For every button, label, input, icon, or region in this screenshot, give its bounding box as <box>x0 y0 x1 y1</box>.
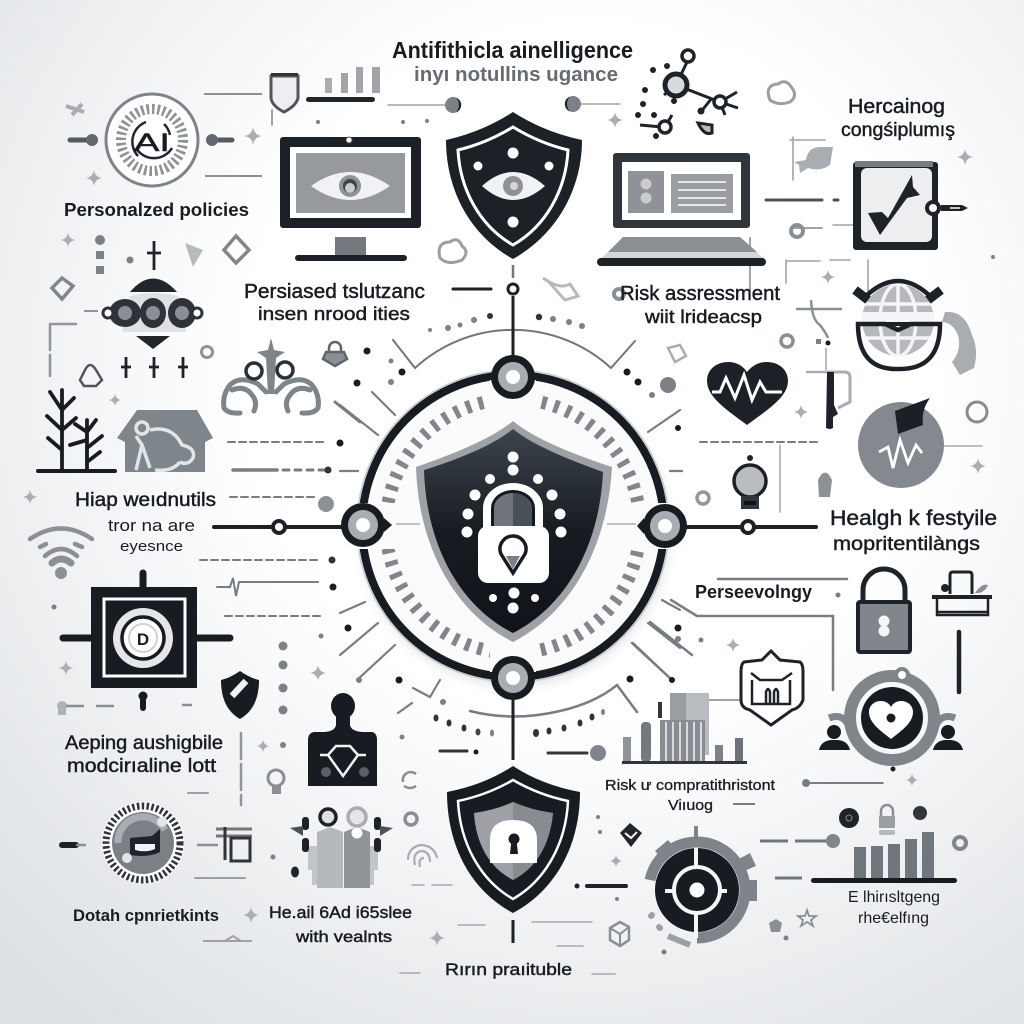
label: rırın: Rırın praıituble <box>445 960 572 979</box>
connector: shield dashes <box>440 745 606 943</box>
icon: gray alert circle <box>858 398 987 488</box>
icon: gray house <box>117 410 213 472</box>
label: elhirısltgeng: E lhirısltgeng <box>848 889 940 906</box>
label: hiap: eyesnce <box>120 538 183 555</box>
connectors: bottom right <box>733 780 883 804</box>
label: perseevolngy: Perseevolngy <box>695 582 812 602</box>
icon: cloud rings top <box>439 82 795 263</box>
icon: bar chart <box>760 805 966 883</box>
icon: globe <box>855 281 976 375</box>
icon: group of people <box>290 808 437 888</box>
label: persiased <box>244 281 425 324</box>
scattered dots <box>52 119 995 954</box>
sparkles <box>23 112 986 946</box>
icon: diamond badges <box>52 236 249 299</box>
icon: desk <box>932 572 992 692</box>
icon: house emblem <box>741 651 803 725</box>
connector dots under title <box>445 96 581 113</box>
label: hercainog: congśiplumış <box>841 120 955 141</box>
icon: eye shield <box>446 112 582 259</box>
label: health lifestyle: Healgh k festyile <box>830 507 997 530</box>
hub: right connector <box>685 521 816 533</box>
label: health with vealnts <box>269 903 412 946</box>
label: risk assessment <box>620 283 780 327</box>
icon: check document <box>766 161 968 250</box>
small footer mark <box>203 936 252 941</box>
icon: key ring <box>268 770 416 794</box>
icon: heart gear with people <box>819 669 963 772</box>
hub shadow <box>363 380 667 684</box>
icon: small shield <box>221 671 259 719</box>
hub: bottom connector <box>512 698 514 760</box>
icon: wire tool <box>781 300 850 429</box>
icon: small ring and mark <box>543 225 803 300</box>
title: Antifithicla ainelligence <box>392 37 633 63</box>
label: aeping <box>65 733 223 777</box>
connector: small key <box>57 701 192 715</box>
icon: lungs emblem <box>224 338 318 413</box>
icon: AI badge <box>66 94 262 186</box>
hub: padlock <box>478 483 549 583</box>
connector: top shield to hub <box>453 265 518 358</box>
icon: triple node cluster <box>80 241 212 386</box>
icon: trees <box>38 390 115 471</box>
label: persiased: Persiased tslutzanc <box>244 281 425 303</box>
icon: lens frame: D <box>137 630 149 649</box>
title: inyı notullins ugance <box>414 64 618 86</box>
icon: small lock tag <box>610 823 642 946</box>
icon: heart with pulse <box>707 362 788 425</box>
icon: molecular network <box>635 50 738 139</box>
icon: AI badge: AI <box>134 129 170 157</box>
label: aeping: Aeping aushigbile <box>65 733 223 754</box>
label: persiased: insen nrood ities <box>258 304 410 324</box>
title <box>392 37 633 86</box>
label: elhirısltgeng <box>848 889 940 927</box>
icon: small shield and bars <box>271 67 380 112</box>
label: risk assessment: wiit lrideacsp <box>644 307 762 327</box>
label: aeping: modcirıaline lott <box>67 756 217 777</box>
label: risk comprehensive <box>605 777 776 814</box>
small pentagon and star <box>769 910 816 932</box>
icon: small padlock <box>323 342 686 366</box>
hub: central dial <box>345 370 681 682</box>
icon: cityscape chart <box>622 693 747 764</box>
label: data contacts: Dotah cpnrietkints <box>73 906 219 925</box>
icon: lock large <box>858 569 910 652</box>
label: health with vealnts: with vealnts <box>295 929 392 946</box>
label: risk comprehensive: Risk ư compratithristont <box>605 777 776 794</box>
icon: person silhouette <box>308 693 377 786</box>
icon: laptop <box>597 153 766 266</box>
hub: shield dots <box>462 452 566 614</box>
label: hiap <box>75 490 216 555</box>
label: hercainog: Hercainog <box>848 96 945 118</box>
label: elhirısltgeng: rhe€elfıng <box>858 910 929 927</box>
label: health lifestyle: mopritentilàngs <box>833 534 980 555</box>
label: health with vealnts: He.ail 6Ad i65slee <box>269 903 412 922</box>
decorative connector lines and dots <box>50 104 982 974</box>
label: personalized policies: Personalzed policies <box>64 199 249 220</box>
icon: small box <box>216 827 252 861</box>
icon: wifi <box>30 528 92 579</box>
icon: eye monitor <box>280 137 421 261</box>
hub: left connector <box>214 521 342 533</box>
icon: lens frame <box>63 573 230 711</box>
label: health lifestyle <box>830 507 997 555</box>
icon: fish shape <box>794 147 833 173</box>
label: hiap: tror na are <box>108 516 195 535</box>
label: hiap: Hiap weıdnutils <box>75 490 216 511</box>
label: risk comprehensive: Viıuog <box>668 797 713 814</box>
icon: target gear <box>574 826 757 945</box>
hub: shield <box>416 421 612 642</box>
hub: nodes <box>341 355 687 700</box>
icon: padlock shield bottom <box>447 766 580 913</box>
icon: dial <box>62 802 218 884</box>
label: risk assessment: Risk assressment <box>620 283 780 305</box>
icon: light bulb <box>697 455 832 509</box>
label: hercainog <box>841 96 955 141</box>
